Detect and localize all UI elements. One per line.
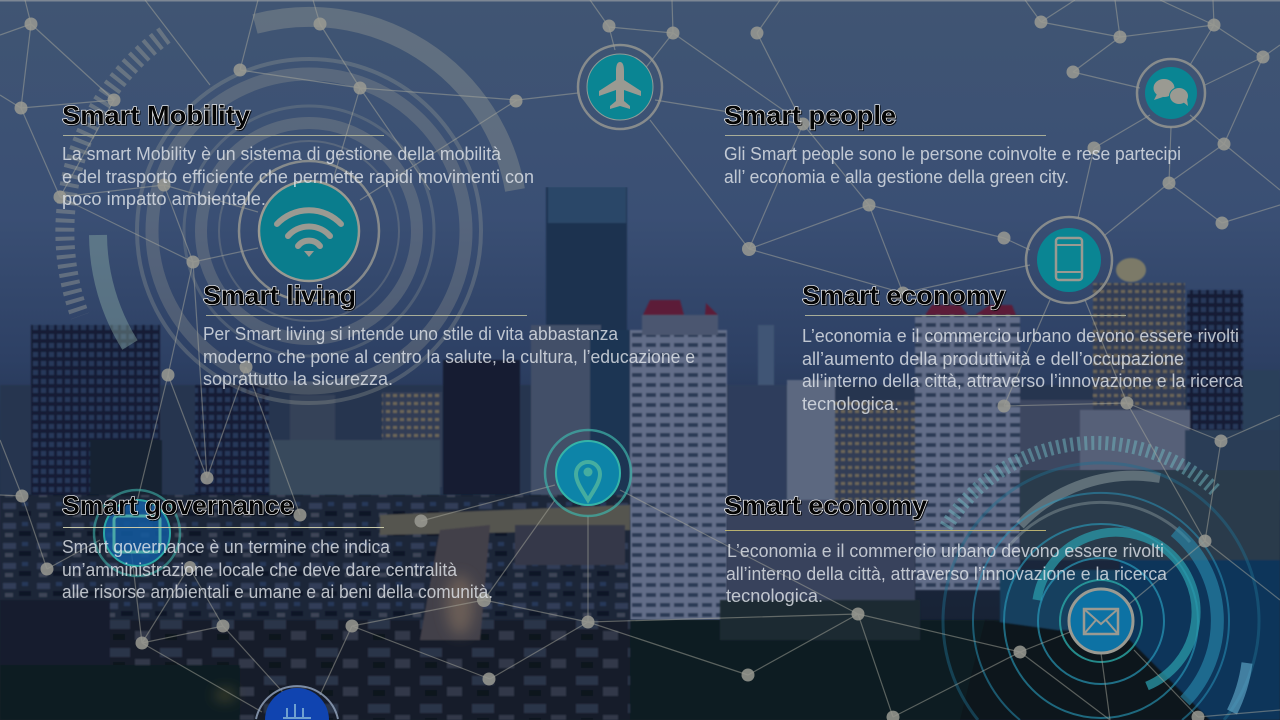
- text block: Smart governance è un termine che indica: [62, 536, 391, 557]
- divider: [63, 527, 384, 528]
- decorative HUD rings around mail icon: [943, 443, 1259, 720]
- icon: chat bubbles: [1137, 59, 1205, 127]
- heading: Smart Mobility: [62, 100, 251, 130]
- text block: un’amministrazione locale che deve dare centralità: [62, 559, 458, 580]
- text block: Gli Smart people sono le persone coinvolte e rese partecipi: [724, 143, 1181, 164]
- divider: [725, 530, 1046, 531]
- text block: moderno che pone al centro la salute, la cultura, l’educazione e: [203, 346, 695, 367]
- text block: L’economia e il commercio urbano devono essere rivolti: [802, 325, 1239, 346]
- panel: Smart economy (upper): [802, 280, 1244, 414]
- panel: Smart people: [724, 100, 1181, 187]
- background: low-rise city: [0, 470, 1280, 720]
- text block: all’aumento della produttività e dell’occupazione: [802, 348, 1184, 369]
- icon: envelope: [1069, 589, 1133, 653]
- text block: poco impatto ambientale.: [62, 188, 266, 209]
- text block: all’ economia e alla gestione della green city.: [724, 166, 1069, 187]
- heading: Smart governance: [62, 490, 294, 520]
- heading: Smart living: [203, 280, 356, 310]
- text block: L’economia e il commercio urbano devono essere rivolti: [727, 540, 1164, 561]
- icon: map pin: [545, 430, 631, 516]
- panel: Smart governance: [62, 490, 493, 602]
- decorative HUD rings around wifi icon: [65, 17, 515, 403]
- text block: tecnologica.: [726, 585, 823, 606]
- text block: Per Smart living si intende uno stile di vita abbastanza: [203, 323, 619, 344]
- icon: city building: [256, 686, 338, 720]
- divider: [725, 135, 1046, 136]
- text block: e del trasporto efficiente che permette rapidi movimenti con: [62, 166, 534, 187]
- heading: Smart economy: [802, 280, 1006, 310]
- text block: tecnologica.: [802, 393, 899, 414]
- icon: tablet: [94, 490, 180, 576]
- text block: alle risorse ambientali e umane e ai beni della comunità.: [62, 581, 493, 602]
- background: top edge line: [0, 0, 1280, 2]
- icon: airplane: [578, 45, 662, 129]
- icon: smartphone: [1026, 217, 1112, 303]
- background: city skyline: [0, 187, 1280, 620]
- text block: all’interno della città, attraverso l’innovazione e la ricerca: [802, 370, 1244, 391]
- heading: Smart economy: [724, 490, 928, 520]
- text block: soprattutto la sicurezza.: [203, 368, 393, 389]
- panel: Smart living: [203, 280, 695, 389]
- divider: [805, 315, 1126, 316]
- background: city light glow: [215, 575, 474, 700]
- panel: Smart Mobility: [62, 100, 534, 209]
- icon: wifi: [239, 161, 379, 301]
- text block: all’interno della città, attraverso l’innovazione e la ricerca: [726, 563, 1168, 584]
- divider: [206, 315, 527, 316]
- divider: [63, 135, 384, 136]
- heading: Smart people: [724, 100, 896, 130]
- text block: La smart Mobility è un sistema di gestione della mobilità: [62, 143, 502, 164]
- panel: Smart economy (lower): [724, 490, 1168, 606]
